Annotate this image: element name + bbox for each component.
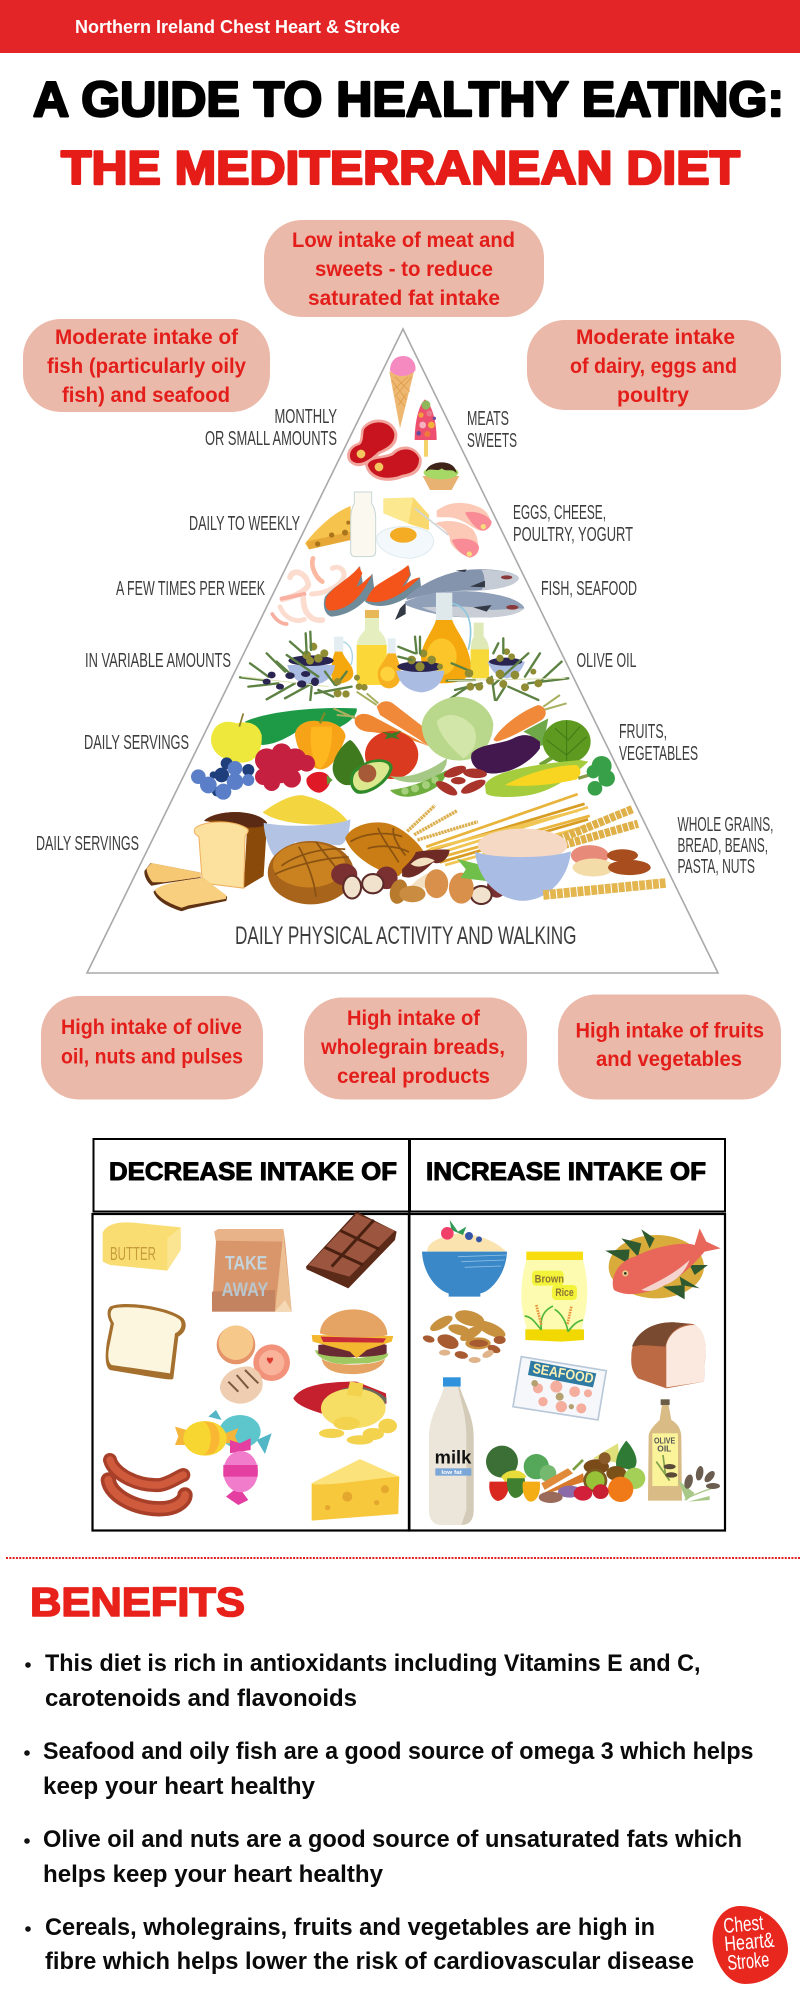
tomato [365,731,418,779]
callout: moderate intake of fish: Moderate intake of [55,326,239,349]
olives on branches [263,669,542,698]
apple [211,713,262,763]
round loaf [268,841,354,904]
bread loaf [194,812,267,888]
couscous bowl [263,795,350,857]
eggplant [471,718,548,774]
benefit: unsaturated fats: helps keep your heart healthy [43,1861,384,1888]
icon: brown rice: Brown [535,1274,564,1286]
callout: moderate intake of fish: fish) and seafood [62,384,230,407]
second loaf [345,822,425,876]
callout: high intake of fruits and vegetables: High intake of fruits [576,1020,764,1042]
mixed nuts [571,845,651,876]
almonds [387,877,425,906]
heading: benefits: BENEFITS [30,1579,245,1625]
olive branches [240,632,568,700]
icon: chocolate [306,1212,397,1288]
callout: high intake of olive oil: oil, nuts and pulses [61,1046,243,1068]
panel: increase intake foods [409,1214,725,1530]
icon: brown rice [521,1252,587,1342]
salmon steaks [324,565,421,617]
icon: butter: BUTTER [110,1243,156,1264]
pyramid labels left: OR SMALL AMOUNTS [205,428,337,450]
pyramid labels left: DAILY SERVINGS [84,732,189,754]
icon: sweets [175,1410,272,1505]
walnuts [425,869,474,904]
carrots [333,692,466,760]
brazil nut [402,850,450,888]
shrimps [272,558,344,624]
icon: sausages [108,1460,185,1509]
table header: decrease: DECREASE INTAKE OF [109,1158,397,1186]
benefit: unsaturated fats [24,1826,742,1888]
avocado [333,740,393,794]
icon: cheese [312,1459,399,1521]
beans [434,763,487,798]
benefit: antioxidants [25,1650,700,1712]
pyramid labels left: A FEW TIMES PER WEEK [116,578,265,600]
icon: olive branch [678,1465,720,1502]
corn [485,760,588,797]
title [33,73,784,194]
callout: moderate intake of dairy: poultry [617,384,689,407]
tier: dairy, eggs, poultry, fish, seafood and olive oil [240,492,568,700]
callout: moderate intake of dairy [527,320,781,410]
comparison table [92,1139,725,1531]
table header: increase: INCREASE INTAKE OF [426,1158,706,1186]
icon: milk bottle: low fat [441,1470,462,1476]
benefit: fibre: fibre which helps lower the risk of cardiovascular disease [45,1948,694,1975]
broccoli [578,756,615,796]
icon: wholegrain loaf [631,1322,706,1388]
icon: takeaway bag: AWAY [222,1280,268,1301]
bread slices [144,863,227,911]
pyramid labels right: FRUITS, [619,721,667,743]
pyramid labels right: EGGS, CHEESE, [513,502,606,524]
icon: milk bottle: milk [435,1446,472,1467]
icon: olive oil bottle [648,1399,682,1501]
food pyramid [36,329,774,973]
callout: high intake of olive oil [41,996,263,1100]
header bar: Northern Ireland Chest Heart & Stroke [75,17,400,37]
tier: meats and sweets [347,356,459,490]
title: A GUIDE TO HEALTHY EATING: [33,73,784,127]
icon: olive oil bottle: OLIVE [654,1436,676,1445]
pyramid labels right: SWEETS [467,430,517,452]
callout: high intake of wholegrain: wholegrain breads, [320,1036,505,1059]
right wheat [553,809,638,845]
icon: seafood pack [513,1357,606,1420]
callout: low intake of meat and sweets: sweets - to reduce [315,258,493,281]
pyramid labels right: VEGETABLES [619,743,698,765]
callout: low intake of meat and sweets: saturated fat intake [308,287,500,310]
peas [390,758,447,797]
pyramid labels left [36,406,337,855]
oil bottles [331,593,489,688]
benefit: unsaturated fats: Olive oil and nuts are a good source of unsaturated fats which [43,1826,742,1853]
logo: Chest Heart & Stroke: Chest [722,1912,764,1938]
icon: bowl of oats [422,1220,507,1297]
carrot right [493,695,567,742]
benefit: antioxidants: This diet is rich in antioxidants including Vitamins E and C, [45,1650,700,1677]
fish [395,569,524,620]
wheat stalks [407,805,478,840]
table header: increase [410,1139,725,1212]
callout: high intake of olive oil: High intake of olive [61,1016,242,1039]
pyramid labels left: MONTHLY [274,406,337,428]
pyramid labels right: MEATS [467,408,509,430]
icon: brown rice: Rice [555,1287,574,1299]
benefit: antioxidants: carotenoids and flavonoids [45,1685,357,1712]
pyramid labels right: OLIVE OIL [576,650,636,672]
callout: high intake of fruits and vegetables: and vegetables [596,1048,742,1071]
cabbage [422,697,493,760]
icon: burger [312,1309,393,1374]
callout: high intake of fruits and vegetables [558,994,781,1100]
pepper [295,713,346,769]
pyramid labels left: DAILY SERVINGS [36,833,139,855]
tier: fruits and vegetables [191,692,615,800]
icon: vegetables and fruit [486,1441,645,1503]
raspberries [255,743,315,791]
bottom wheat [543,883,666,895]
pyramid labels right: FISH, SEAFOOD [541,578,637,600]
pistachio [457,859,492,881]
pyramid outline [87,329,718,973]
logo: Chest Heart & Stroke [713,1906,788,1984]
icon: crisps [293,1382,397,1445]
benefit: fibre [25,1914,694,1975]
poultry [435,503,492,558]
icon: takeaway bag: TAKE [225,1253,267,1274]
rice bowl [475,829,571,901]
icon: bread slice [106,1304,186,1379]
callout: high intake of wholegrain [304,998,527,1100]
callout: moderate intake of fish [23,319,270,412]
callout: moderate intake of fish: fish (particularly oily [47,355,246,378]
benefit: fibre: Cereals, wholegrains, fruits and vegetables are high in [45,1914,655,1941]
icon: olive oil bottle: OIL [657,1444,671,1453]
logo: Chest Heart & Stroke: Heart& [723,1929,775,1956]
callout: high intake of wholegrain: cereal products [337,1065,490,1088]
icon: butter [103,1222,181,1271]
strawberry [306,772,333,793]
callout: low intake of meat and sweets: Low intake of meat and [292,229,515,252]
olive bowls [287,643,525,692]
panel: decrease intake foods [92,1212,409,1530]
artichoke [540,720,591,765]
benefit: omega 3: keep your heart healthy [43,1773,316,1800]
icon: cookies [217,1325,290,1404]
logo: Chest Heart & Stroke: Stroke [726,1948,770,1975]
callout: moderate intake of dairy: Moderate intake [576,326,735,349]
benefit: omega 3: Seafood and oily fish are a good source of omega 3 which helps [43,1738,754,1765]
title: THE MEDITERRANEAN DIET [61,141,740,194]
hazelnuts [331,863,506,904]
icon: milk bottle [429,1377,474,1525]
callout: low intake of meat and sweets [264,220,544,317]
callout: high intake of wholegrain: High intake of [347,1007,481,1030]
cucumber [245,708,357,745]
pasta [426,794,590,865]
icon: peanuts [422,1307,508,1363]
callout: moderate intake of dairy: of dairy, eggs and [570,355,737,378]
icon: seafood pack: SEAFOOD [531,1360,595,1386]
benefit: omega 3 [24,1738,753,1800]
icon: red fish on plate [605,1228,721,1299]
pyramid labels right: POULTRY, YOGURT [513,524,633,546]
pyramid labels right [467,408,774,878]
pyramid labels left: IN VARIABLE AMOUNTS [85,650,231,672]
blueberries [191,757,254,800]
table divider [408,1139,410,1531]
base label: DAILY PHYSICAL ACTIVITY AND WALKING [235,922,576,950]
table header: decrease [94,1139,409,1212]
icon: takeaway bag [212,1229,292,1312]
benefits list [24,1650,753,1975]
header bar [0,0,800,53]
tier: grains, bread, beans, pasta and nuts [144,794,666,911]
pyramid labels left: DAILY TO WEEKLY [189,513,300,535]
dairy and eggs [305,492,448,558]
